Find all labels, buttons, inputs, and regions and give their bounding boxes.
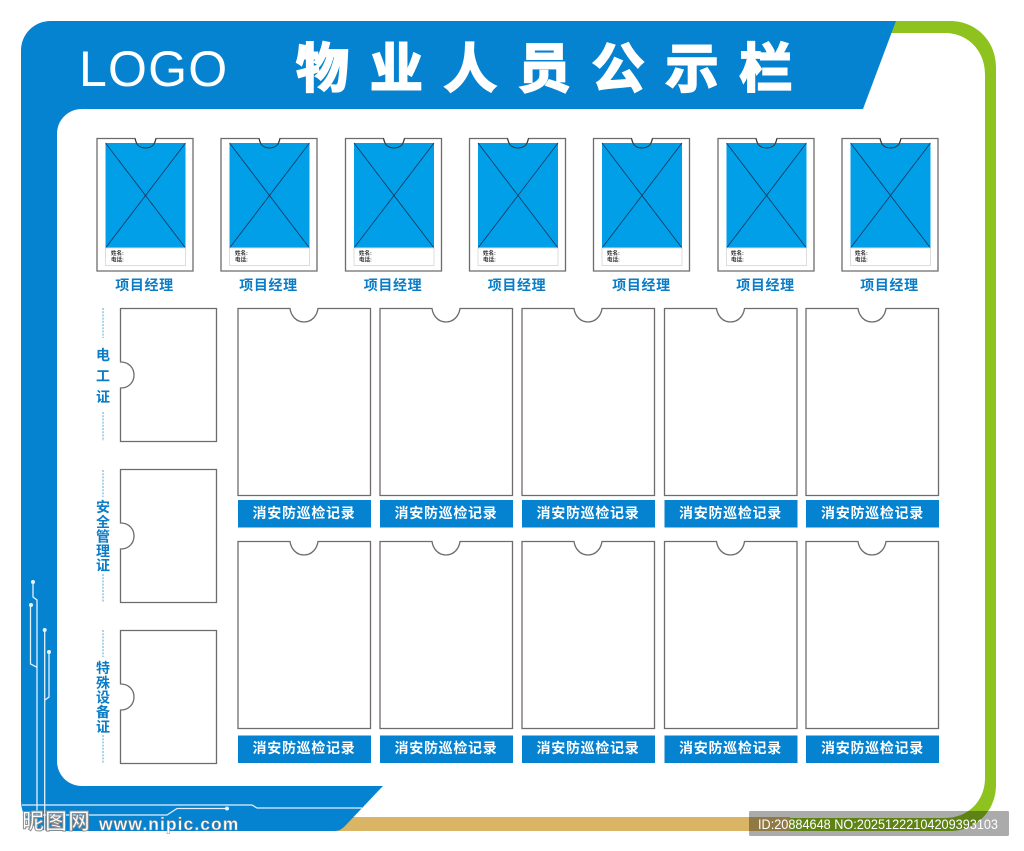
- watermark: site logo: 昵图网: [22, 809, 91, 834]
- record 3: 消安防巡检记录: [537, 505, 639, 521]
- manager card 5: 姓名:: [607, 249, 620, 257]
- record 4: 消安防巡检记录: [679, 505, 782, 521]
- record 4: [664, 308, 798, 528]
- manager card 7: 项目经理: [860, 277, 919, 293]
- manager card 6: 姓名:: [731, 249, 744, 257]
- record 5: [806, 308, 939, 528]
- manager card 1: 电话:: [111, 256, 124, 264]
- certificate: special equipment: 设: [96, 690, 110, 706]
- record 3: [522, 308, 655, 528]
- record 7: [380, 542, 513, 763]
- manager card 1: [97, 138, 193, 293]
- record 5: 消安防巡检记录: [821, 505, 924, 521]
- manager card 7: 姓名:: [855, 249, 868, 257]
- manager card 2: 项目经理: [239, 277, 298, 293]
- certificate: safety management: 全: [96, 514, 110, 530]
- certificate: special equipment: [96, 630, 216, 764]
- manager card 5: 电话:: [607, 256, 620, 264]
- title: 物业人员公示栏: [296, 40, 813, 99]
- panel: inspection records row 1: [238, 308, 939, 528]
- certificate: safety management: [96, 470, 216, 602]
- record 2: [380, 308, 513, 528]
- record 9: 消安防巡检记录: [679, 740, 782, 756]
- manager card 3: [346, 138, 442, 293]
- manager card 6: 项目经理: [736, 277, 795, 293]
- manager card 4: 项目经理: [488, 277, 546, 293]
- watermark: image id: ID:20884648 NO:20251222104209393103: [758, 816, 998, 832]
- certificate: special equipment: 殊: [96, 675, 110, 691]
- manager card 2: [221, 138, 317, 293]
- record 9: [664, 542, 798, 763]
- certificate: safety management: 管: [96, 528, 110, 544]
- manager card 7: 电话:: [855, 256, 868, 264]
- record 10: [806, 542, 939, 763]
- manager card 3: 姓名:: [359, 249, 372, 257]
- manager card 2: 电话:: [235, 256, 248, 264]
- certificate: electrician: [96, 308, 216, 442]
- manager card 4: [470, 138, 566, 293]
- watermark: image id: [749, 811, 1009, 836]
- certificate: electrician: 工: [96, 368, 110, 384]
- record 6: 消安防巡检记录: [253, 740, 355, 756]
- manager card 6: [718, 138, 814, 293]
- manager card 3: 电话:: [359, 256, 372, 264]
- manager card 5: 项目经理: [612, 277, 671, 293]
- record 1: 消安防巡检记录: [253, 505, 355, 521]
- record 7: 消安防巡检记录: [395, 740, 497, 756]
- manager card 2: 姓名:: [235, 249, 248, 257]
- certificate: safety management: 证: [96, 558, 110, 574]
- record 8: 消安防巡检记录: [537, 740, 639, 756]
- manager card 1: 项目经理: [115, 277, 174, 293]
- certificate: safety management: 理: [96, 543, 110, 559]
- certificate: safety management: 安: [96, 499, 110, 515]
- certificate: special equipment: 特: [96, 660, 110, 676]
- manager card 1: 姓名:: [111, 249, 124, 257]
- manager card 6: 电话:: [731, 256, 744, 264]
- panel: manager photo cards: [97, 138, 938, 293]
- manager card 3: 项目经理: [364, 277, 422, 293]
- manager card 5: [594, 138, 690, 293]
- record 10: 消安防巡检记录: [821, 740, 924, 756]
- record 1: [238, 308, 371, 528]
- record 8: [522, 542, 655, 763]
- certificate: electrician: 证: [96, 389, 110, 405]
- watermark: site logo: [22, 809, 239, 834]
- manager card 4: 姓名:: [483, 249, 496, 257]
- certificate: electrician: 电: [96, 347, 110, 363]
- gold bottom strip: [337, 817, 790, 831]
- certificate: special equipment: 备: [96, 704, 110, 720]
- watermark: site logo: www.nipic.com: [98, 814, 239, 834]
- record 6: [238, 542, 371, 763]
- record 2: 消安防巡检记录: [395, 505, 497, 521]
- green frame: [770, 21, 996, 831]
- manager card 7: [842, 138, 938, 293]
- certificate: special equipment: 证: [96, 719, 110, 735]
- circuit lines: [22, 580, 362, 831]
- logo text: LOGO: [79, 41, 228, 97]
- panel: inspection records row 2: [238, 542, 939, 763]
- panel: certificates: [96, 308, 216, 764]
- manager card 4: 电话:: [483, 256, 496, 264]
